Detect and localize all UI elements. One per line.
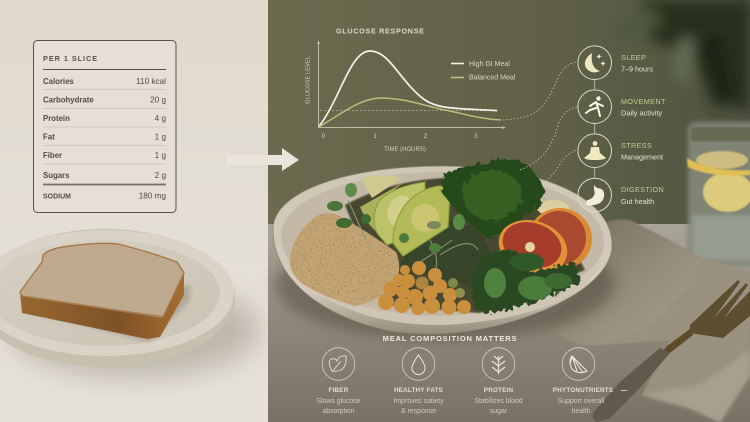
axis labels: 0 — [322, 133, 326, 140]
movement: MOVEMENT — [621, 97, 666, 106]
rows: Sugars — [43, 171, 70, 180]
stress — [578, 134, 663, 168]
bowl shadow — [275, 230, 615, 340]
upper napkin — [540, 219, 703, 345]
rows: 110 kcal — [136, 77, 166, 86]
protein: PROTEIN — [484, 387, 513, 394]
stress: Management — [621, 152, 663, 162]
bread shadow — [30, 285, 190, 342]
phytonutrients — [553, 348, 627, 415]
healthy fats: & response — [401, 408, 436, 415]
sleep: SLEEP — [621, 53, 646, 62]
axis arrowheads — [317, 40, 506, 129]
phytonutrients: health — [571, 408, 591, 415]
avocado slices — [360, 182, 450, 256]
phytonutrients: PHYTONUTRIENTS — [553, 387, 613, 394]
bowl rim light — [285, 255, 600, 325]
chart title: GLUCOSE RESPONSE — [336, 26, 425, 36]
fiber: FIBER — [329, 387, 349, 394]
dark microgreens base — [400, 222, 490, 285]
axis labels: GLUCOSE LEVEL — [306, 55, 312, 104]
rows: Fiber — [43, 151, 62, 160]
axis labels — [306, 55, 478, 153]
plate shadow — [10, 282, 260, 378]
bread slice — [20, 243, 184, 339]
legend: Balanced Meal — [469, 74, 516, 82]
blurred plant — [610, 0, 750, 110]
arrow — [226, 148, 299, 171]
chickpeas — [378, 261, 471, 315]
rows: Carbohydrate — [43, 96, 94, 104]
plate well — [0, 240, 220, 346]
stress: STRESS — [621, 141, 652, 150]
kale — [440, 158, 544, 240]
quinoa — [290, 213, 399, 306]
fiber — [316, 348, 361, 415]
high GI curve — [318, 51, 497, 127]
rows: Calories — [43, 77, 74, 86]
axis labels: 1 — [373, 133, 377, 140]
protein: sugar — [490, 408, 508, 415]
plate top — [0, 230, 234, 356]
lifestyle factors — [578, 46, 666, 212]
fiber: absorption — [322, 408, 355, 415]
axes — [318, 41, 504, 128]
healthy fats: Improves satiety — [393, 398, 444, 405]
balanced meal curve — [318, 98, 501, 127]
shaded bed under food — [345, 178, 585, 313]
water glass with lemon — [687, 122, 750, 265]
rows: 4 g — [155, 114, 166, 123]
spinach and microgreens — [327, 183, 580, 313]
protein: Stabilizes blood — [474, 398, 523, 405]
protein — [474, 348, 523, 415]
bowl inside — [281, 172, 604, 316]
phytonutrients: Support overall — [557, 398, 605, 405]
pale citrus behind orange — [537, 200, 569, 216]
bowl with food — [273, 158, 615, 340]
bread plate — [0, 229, 260, 378]
digestion — [578, 178, 664, 212]
lower napkin — [600, 258, 750, 422]
section title: MEAL COMPOSITION MATTERS — [383, 334, 517, 343]
axis labels: TIME (HOURS) — [384, 147, 426, 153]
rows: Fat — [43, 132, 55, 142]
axis labels: 2 — [424, 133, 428, 140]
digestion: DIGESTION — [621, 185, 664, 194]
healthy fats — [393, 348, 444, 415]
dotted connectors — [503, 62, 578, 183]
nutrition label panel — [34, 40, 176, 212]
sleep — [578, 46, 653, 80]
rows: 1 g — [155, 132, 166, 142]
fork — [592, 280, 750, 422]
legend: High GI Meal — [469, 61, 510, 68]
fiber: Slows glucose — [316, 398, 361, 405]
rows: SODIUM — [43, 194, 71, 200]
glucose chart — [306, 26, 516, 153]
healthy fats: HEALTHY FATS — [394, 387, 443, 394]
background: stone table — [268, 224, 750, 422]
label heading: PER 1 SLICE — [43, 54, 98, 63]
movement: Daily activity — [621, 108, 662, 118]
digestion: Gut health — [621, 197, 654, 206]
meal composition — [316, 334, 627, 415]
plate body — [0, 229, 235, 367]
rows — [43, 70, 166, 200]
rows: 2 g — [155, 171, 166, 180]
legend — [451, 61, 516, 82]
axis labels: 3 — [474, 133, 478, 140]
background: left cream panel — [0, 0, 268, 422]
bowl body — [273, 166, 612, 334]
background: olive wall — [268, 0, 750, 226]
blood orange slices — [492, 208, 592, 283]
rows: 1 g — [155, 151, 166, 160]
rows: 20 g — [150, 96, 166, 104]
lower napkin light fold — [642, 350, 750, 422]
movement — [578, 90, 666, 123]
rows: Protein — [43, 114, 70, 123]
rows: 180 mg — [139, 192, 166, 200]
lemon wedge — [361, 175, 402, 198]
sleep: 7–9 hours — [621, 64, 653, 74]
